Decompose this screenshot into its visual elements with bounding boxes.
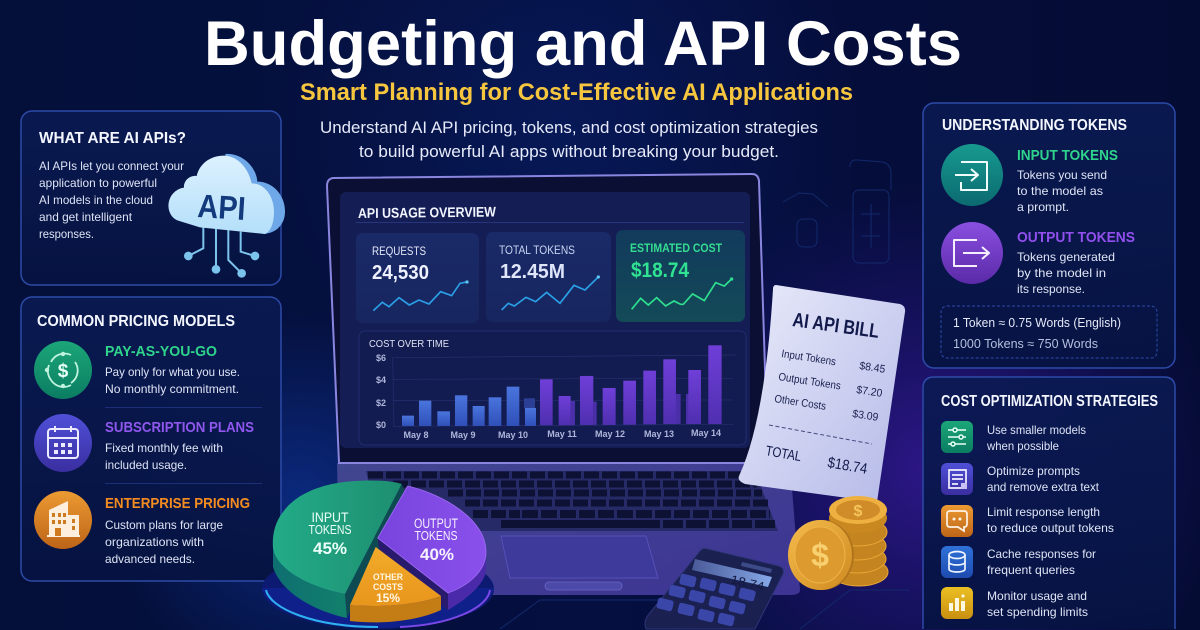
pie slice: output tokens 40%: 40% xyxy=(420,545,454,564)
card: requests: REQUESTS xyxy=(372,244,426,258)
strategy: cache responses xyxy=(941,546,1096,578)
strategy: limit response length xyxy=(941,505,1114,537)
token type: input: to the model as xyxy=(1017,184,1103,198)
strategy: smaller models: when possible xyxy=(986,439,1059,453)
pie slice: other costs 15%: COSTS xyxy=(373,582,403,593)
chart: cost over time: May 10 xyxy=(498,430,528,440)
coins xyxy=(788,496,888,590)
pricing: enterprise pricing xyxy=(34,491,250,566)
strategy: monitor usage: set spending limits xyxy=(987,605,1088,619)
receipt: AI API bill: $3.09 xyxy=(852,408,879,424)
strategy: monitor usage xyxy=(941,587,1088,619)
pie slice: other costs 15% xyxy=(350,547,441,606)
chart: cost over time: $0 xyxy=(376,420,386,430)
intro text: to build powerful AI apps without breaking your budget. xyxy=(359,142,779,161)
calculator xyxy=(645,548,784,629)
panel: cost optimization strategies xyxy=(923,377,1175,629)
pricing: enterprise pricing: organizations with xyxy=(105,535,204,549)
pie slice: output tokens 40% xyxy=(378,486,486,593)
token type: output: Tokens generated xyxy=(1017,250,1115,264)
intro text xyxy=(320,118,818,161)
icon: API cloud xyxy=(168,154,285,278)
panel: what are AI APIs xyxy=(21,111,285,285)
pie slice: output tokens 40%: OUTPUT xyxy=(414,516,458,531)
receipt: AI API bill xyxy=(739,285,905,502)
pie chart xyxy=(262,480,494,629)
text: API description: AI models in the cloud xyxy=(39,193,153,207)
card: estimated cost: ESTIMATED COST xyxy=(630,241,723,255)
pricing: pay as you go xyxy=(34,341,240,399)
pie slice: input tokens 45%: INPUT xyxy=(312,509,349,525)
receipt: AI API bill: AI API BILL xyxy=(791,309,880,343)
intro text: Understand AI API pricing, tokens, and cost optimization strategies xyxy=(320,118,818,137)
text: API description: responses. xyxy=(39,227,94,241)
strategy: monitor usage: Monitor usage and xyxy=(987,589,1087,603)
coins: $ xyxy=(811,537,829,573)
token type: input xyxy=(941,144,1118,214)
pricing: pay as you go: Pay only for what you use. xyxy=(105,365,240,379)
panel: common pricing models xyxy=(21,297,281,581)
strategy: smaller models xyxy=(941,421,1086,453)
text: API description xyxy=(39,159,184,241)
subtitle: Smart Planning for Cost-Effective AI Applications xyxy=(300,79,853,106)
callout: token conversion xyxy=(941,306,1157,358)
token type: output xyxy=(941,222,1135,296)
pie slice: other costs 15%: 15% xyxy=(376,591,400,605)
strategy: smaller models: Use smaller models xyxy=(987,423,1086,437)
chart: cost over time: May 14 xyxy=(691,428,721,438)
callout: token conversion: 1 Token ≈ 0.75 Words (English) xyxy=(953,316,1121,330)
chart: cost over time: May 9 xyxy=(450,430,476,440)
strategy: cache responses: Cache responses for xyxy=(987,547,1096,561)
strategy: optimize prompts: and remove extra text xyxy=(987,480,1100,494)
token type: input: INPUT TOKENS xyxy=(1017,147,1118,164)
pricing: pay as you go: $ xyxy=(58,361,69,382)
panel: understanding tokens xyxy=(923,103,1175,368)
callout: token conversion: 1000 Tokens ≈ 750 Words xyxy=(953,337,1098,351)
icon: API cloud: API xyxy=(197,187,247,227)
chart: cost over time: May 12 xyxy=(595,429,625,439)
pricing: enterprise pricing: Custom plans for large xyxy=(105,518,223,532)
chart: cost over time xyxy=(359,331,746,445)
text: API description: and get intelligent xyxy=(39,210,133,224)
chart: cost over time: May 8 xyxy=(403,430,429,440)
pricing: subscription plans: Fixed monthly fee with xyxy=(105,441,223,455)
pie slice: output tokens 40%: TOKENS xyxy=(414,528,458,543)
calculator: 18.74 xyxy=(729,572,766,594)
card: estimated cost xyxy=(616,230,745,322)
heading: cost optimization strategies: COST OPTIMIZATION STRATEGIES xyxy=(941,393,1158,410)
pie slice: input tokens 45% xyxy=(273,480,402,594)
pricing: pay as you go: PAY-AS-YOU-GO xyxy=(105,343,217,360)
receipt: AI API bill: $8.45 xyxy=(859,360,886,376)
card: estimated cost: $18.74 xyxy=(631,259,689,282)
receipt: AI API bill: $7.20 xyxy=(856,384,883,400)
card: total tokens xyxy=(486,232,611,322)
strategy: optimize prompts: Optimize prompts xyxy=(987,464,1080,478)
token type: output: its response. xyxy=(1017,282,1085,296)
card: total tokens: 12.45M xyxy=(500,261,565,283)
pricing: subscription plans xyxy=(34,414,254,472)
coins: $ xyxy=(854,503,863,520)
chart: cost over time: $2 xyxy=(376,398,386,408)
laptop xyxy=(327,174,800,595)
strategy: limit response length: to reduce output tokens xyxy=(987,521,1114,535)
token type: input: a prompt. xyxy=(1017,200,1069,214)
laptop base xyxy=(337,463,800,595)
heading: what are AI APIs: WHAT ARE AI APIs? xyxy=(39,130,186,147)
chart: cost over time: $6 xyxy=(376,353,386,363)
token type: input: Tokens you send xyxy=(1017,168,1107,182)
laptop screen xyxy=(327,174,768,463)
chart: cost over time: May 13 xyxy=(644,429,674,439)
pricing: pay as you go: No monthly commitment. xyxy=(105,382,239,396)
text: API description: application to powerful xyxy=(39,176,157,190)
pricing: enterprise pricing: ENTERPRISE PRICING xyxy=(105,495,250,512)
heading: understanding tokens: UNDERSTANDING TOKENS xyxy=(942,117,1127,134)
chart: cost over time: $4 xyxy=(376,375,386,385)
heading: API usage overview: API USAGE OVERVIEW xyxy=(358,204,497,221)
chart: cost over time: COST OVER TIME xyxy=(369,338,449,350)
text: API description: AI APIs let you connect your xyxy=(39,159,184,173)
heading: common pricing models: COMMON PRICING MODELS xyxy=(37,313,235,330)
receipt: AI API bill: $18.74 xyxy=(826,454,869,478)
receipt: AI API bill: Other Costs xyxy=(774,393,827,413)
pricing: subscription plans: included usage. xyxy=(105,458,187,472)
token type: output: OUTPUT TOKENS xyxy=(1017,229,1135,246)
card: total tokens: TOTAL TOKENS xyxy=(499,243,575,257)
card: requests: 24,530 xyxy=(372,262,429,284)
receipt: AI API bill: Output Tokens xyxy=(778,371,842,393)
pie slice: input tokens 45%: TOKENS xyxy=(308,522,352,537)
pie slice: other costs 15%: OTHER xyxy=(373,572,403,583)
strategy: optimize prompts xyxy=(941,463,1100,495)
pie slice: input tokens 45%: 45% xyxy=(313,539,347,558)
receipt: AI API bill: Input Tokens xyxy=(781,348,837,368)
pie side walls xyxy=(273,484,486,622)
pricing: subscription plans: SUBSCRIPTION PLANS xyxy=(105,419,254,436)
title: Budgeting and API Costs xyxy=(204,9,962,79)
card: requests xyxy=(356,233,479,323)
receipt: AI API bill: TOTAL xyxy=(764,442,803,464)
strategy: cache responses: frequent queries xyxy=(987,563,1075,577)
chart: cost over time: May 11 xyxy=(547,429,577,439)
pricing: enterprise pricing: advanced needs. xyxy=(105,552,195,566)
token type: output: by the model in xyxy=(1017,266,1106,280)
strategy: limit response length: Limit response length xyxy=(987,505,1100,519)
